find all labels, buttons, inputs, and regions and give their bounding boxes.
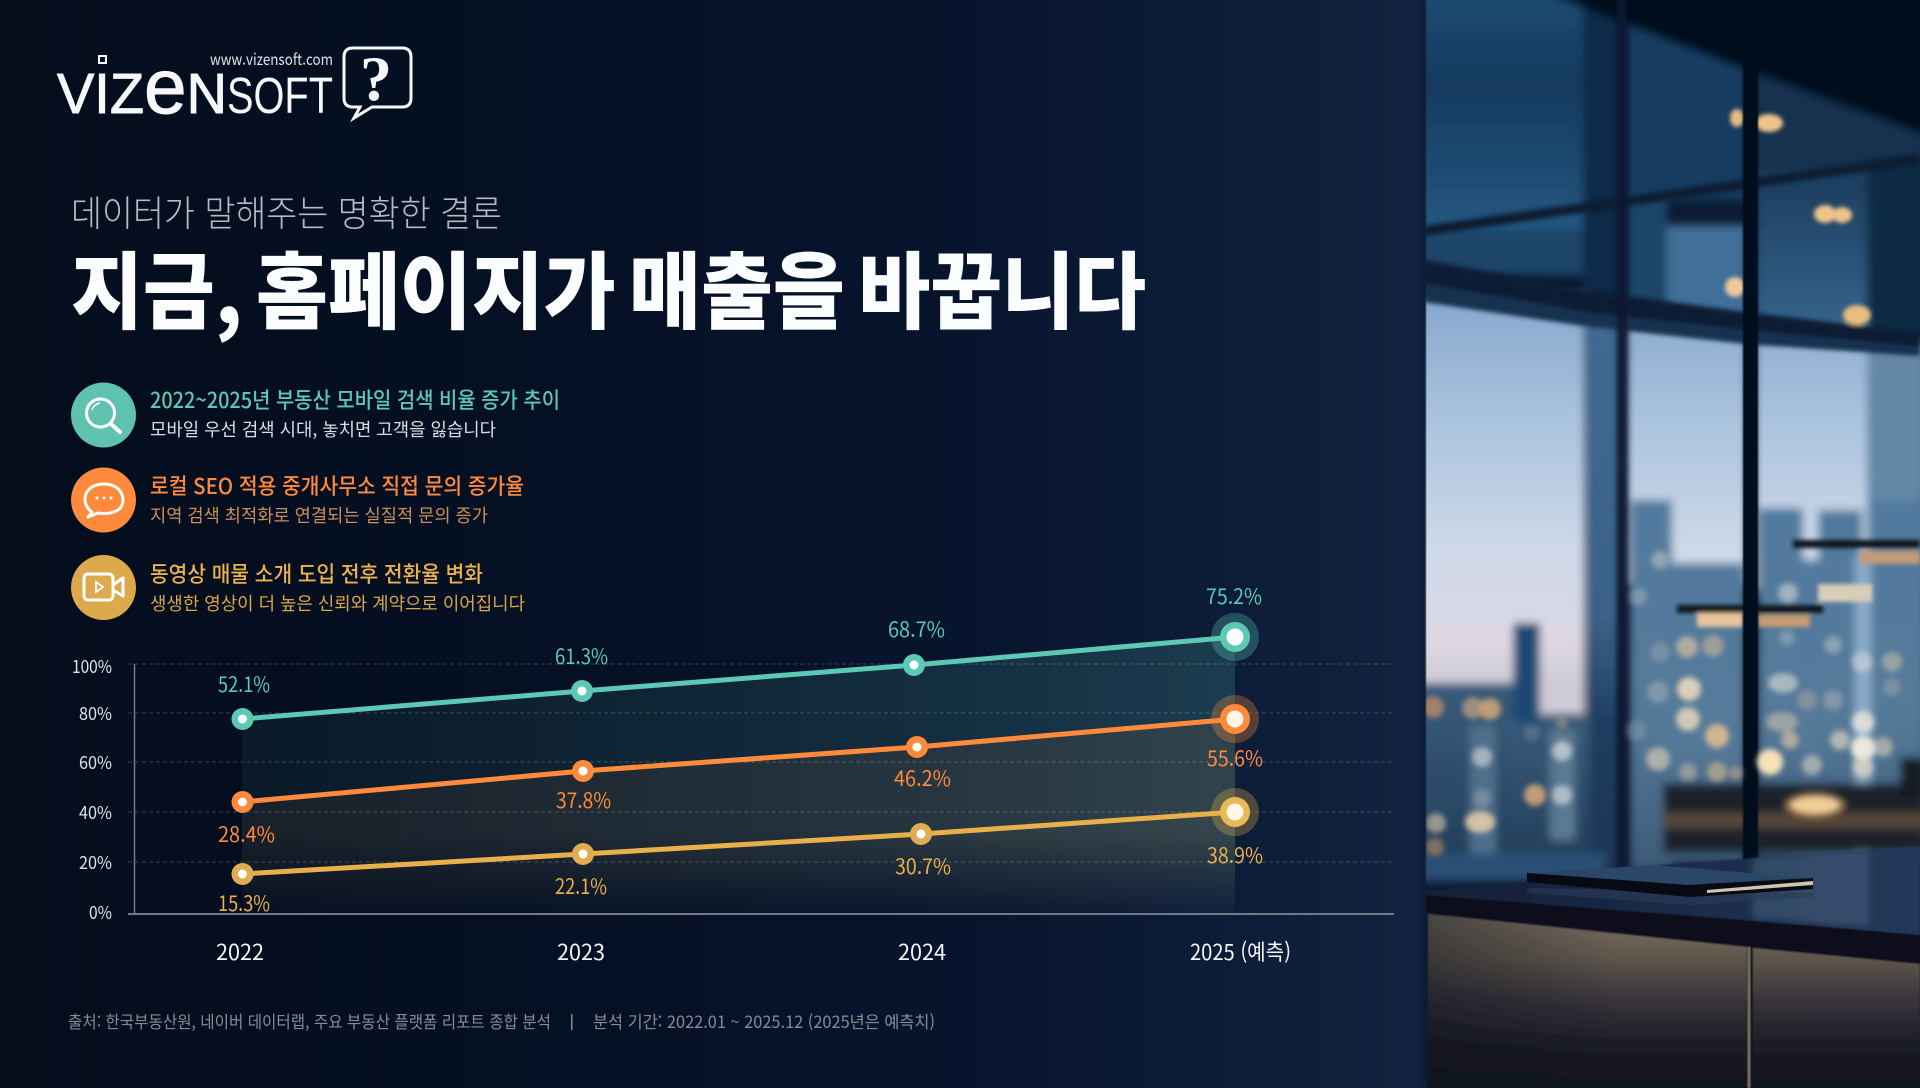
logo: vizensoft [57, 42, 411, 130]
city bokeh lights [1422, 551, 1902, 856]
legend item: mobile search: 2022~2025년 부동산 모바일 검색 비율 증가 추이 [150, 383, 560, 415]
legend item: video listings: 생생한 영상이 더 높은 신뢰와 계약으로 이어집니다 [150, 590, 525, 616]
legend item: mobile search: 모바일 우선 검색 시대, 놓치면 고객을 잃습니다 [150, 416, 496, 442]
logo: vizensoft: SOFT [227, 67, 333, 124]
title: 지금, 홈페이지가 매출을 바꿉니다 [71, 226, 1146, 347]
series: video conversion (gold): 15.3% [218, 888, 270, 918]
grid [128, 664, 1394, 862]
photo: blurred office window and city at dusk [1415, 0, 1920, 1088]
x axis labels: 2022 [216, 935, 264, 967]
x axis labels: 2023 [557, 935, 605, 967]
series: mobile search (teal): 68.7% [888, 614, 945, 644]
kitchen counter and cabinets [1424, 846, 1920, 1088]
series: local SEO (orange): 37.8% [556, 785, 611, 815]
series: video conversion (gold): 38.9% [1207, 840, 1263, 870]
legend item: local SEO: 로컬 SEO 적용 중개사무소 직접 문의 증가율 [150, 469, 524, 501]
area fills [242, 637, 1235, 914]
series: local SEO (orange): 55.6% [1207, 743, 1263, 773]
icon: speech bubble [71, 468, 136, 532]
series: mobile search (teal) [218, 581, 1262, 730]
legend item: local SEO [71, 468, 524, 532]
series: mobile search (teal): 52.1% [218, 669, 270, 699]
series: local SEO (orange): 46.2% [894, 763, 951, 793]
y axis labels [72, 653, 112, 925]
legend item: local SEO: 지역 검색 최적화로 연결되는 실질적 문의 증가 [150, 502, 488, 528]
legend item: video listings [71, 555, 525, 620]
y axis labels: 0% [89, 899, 112, 925]
subtitle: 데이터가 말해주는 명확한 결론 [71, 185, 502, 237]
y axis labels: 60% [79, 749, 112, 775]
source note: 분석 기간: 2022.01 ~ 2025.12 (2025년은 예측치) [593, 1008, 935, 1033]
y axis labels: 100% [72, 653, 112, 679]
icon: magnifier [71, 382, 136, 448]
photo left edge strip [1421, 0, 1426, 1088]
line chart [72, 581, 1394, 967]
x axis labels [216, 935, 1291, 967]
axes [128, 664, 1394, 914]
logo: vizensoft: ? [360, 43, 392, 114]
x axis labels: 2024 [898, 935, 946, 967]
logo: vizensoft: www.vizensoft.com [210, 46, 333, 70]
series: video conversion (gold): 22.1% [555, 871, 607, 901]
series: local SEO (orange) [218, 695, 1263, 849]
source note: 출처: 한국부동산원, 네이버 데이터랩, 주요 부동산 플랫폼 리포트 종합 분석 [68, 1008, 551, 1033]
series: mobile search (teal): 61.3% [555, 641, 608, 671]
series: video conversion (gold) [218, 788, 1263, 918]
counter reflections [1753, 850, 1870, 926]
y axis labels: 80% [79, 700, 112, 726]
x axis labels: 2025 (예측) [1190, 935, 1291, 967]
legend item: mobile search [71, 382, 560, 448]
logo: vizensoft: VIZeN [57, 42, 227, 130]
legend item: video listings: 동영상 매물 소개 도입 전후 전환율 변화 [150, 557, 483, 589]
y axis labels: 40% [79, 799, 112, 825]
y axis labels: 20% [79, 849, 112, 875]
icon: video camera [71, 555, 136, 620]
tablet [1527, 865, 1813, 905]
series: mobile search (teal): 75.2% [1206, 581, 1262, 611]
series: video conversion (gold): 30.7% [895, 851, 951, 881]
series: local SEO (orange): 28.4% [218, 819, 275, 849]
source note [68, 1008, 935, 1033]
